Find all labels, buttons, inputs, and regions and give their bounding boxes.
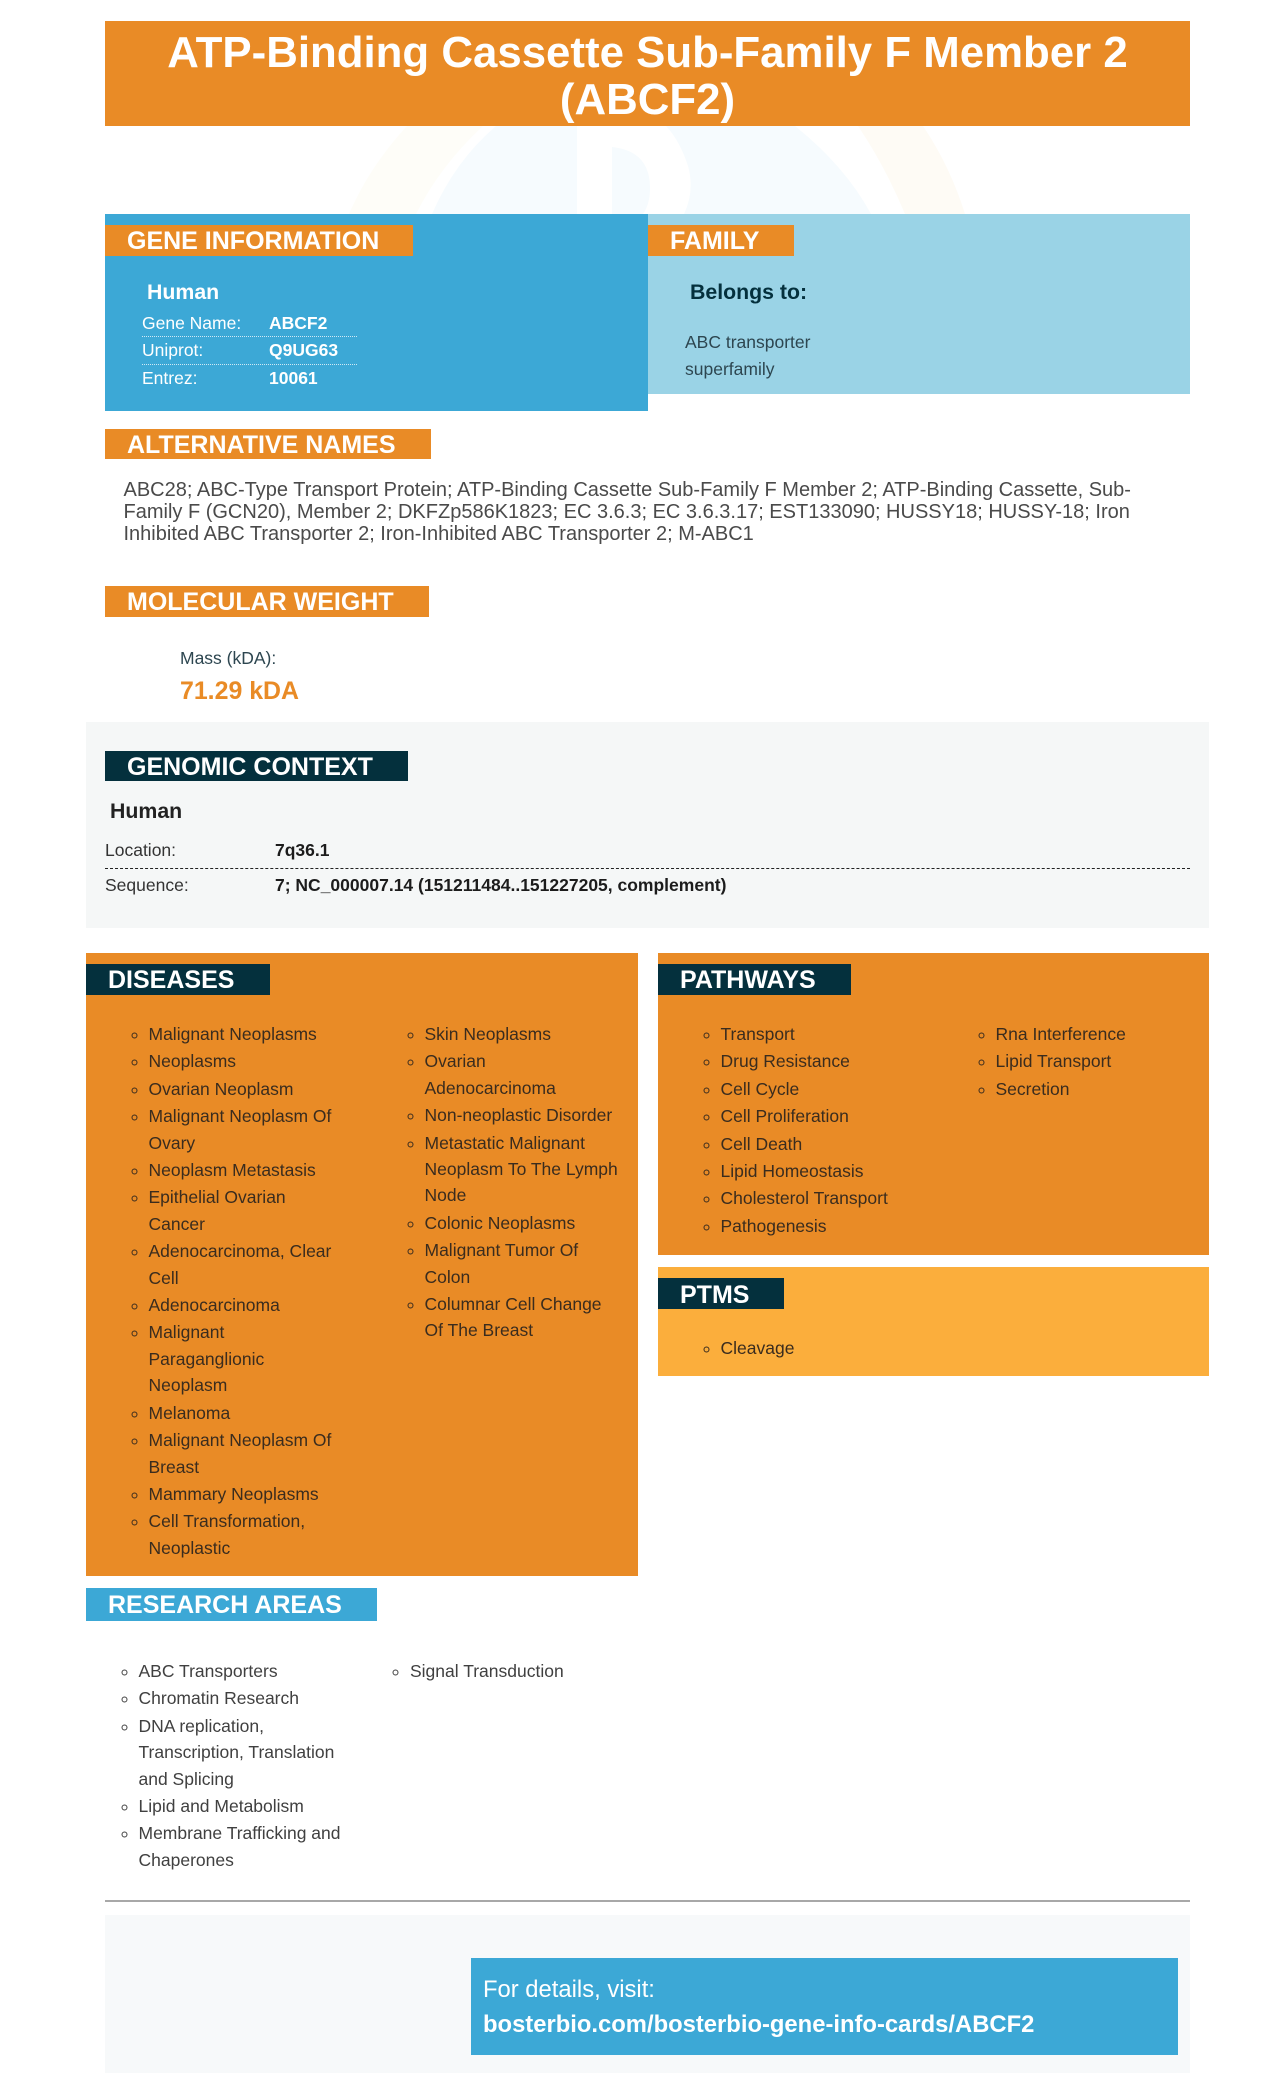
family value bbox=[685, 332, 810, 379]
alternative names text bbox=[124, 479, 1131, 545]
panel: genomic context bbox=[86, 722, 1209, 928]
pathway list column 2: Rna Interference bbox=[996, 1024, 1126, 1044]
pathway list column 1: Cell Cycle bbox=[720, 1079, 799, 1099]
title banner bbox=[105, 21, 1190, 126]
entrez row: Entrez: bbox=[142, 368, 197, 388]
panel: pathways bbox=[658, 953, 1209, 1255]
research list column 1: Chromatin Research bbox=[138, 1688, 299, 1708]
title banner: (ABCF2) bbox=[560, 75, 735, 124]
pathway list column 2 bbox=[978, 1024, 1126, 1099]
background watermark bbox=[432, 126, 965, 214]
species label: Human bbox=[147, 280, 219, 304]
location row bbox=[105, 840, 329, 860]
disease list column 2: Node bbox=[424, 1185, 466, 1205]
heading: ptms: PTMS bbox=[680, 1281, 749, 1309]
panel: ptms bbox=[658, 1267, 1209, 1376]
disease list column 1: Cell bbox=[148, 1268, 179, 1288]
gene name row: Gene Name: bbox=[142, 313, 241, 333]
pathway list column 2: Secretion bbox=[996, 1079, 1069, 1099]
disease list column 1: Adenocarcinoma bbox=[148, 1295, 280, 1315]
disease list column 2: Of The Breast bbox=[424, 1320, 533, 1340]
disease list column 1: Malignant bbox=[148, 1322, 224, 1342]
heading: gene information: GENE INFORMATION bbox=[127, 227, 379, 255]
ptm list: Cleavage bbox=[720, 1338, 794, 1358]
research list column 1 bbox=[122, 1661, 341, 1870]
pathway list column 1: Cholesterol Transport bbox=[720, 1188, 888, 1208]
location row: Location: bbox=[105, 840, 176, 860]
disease list column 2: Columnar Cell Change bbox=[424, 1294, 602, 1314]
alternative names text: Family F (GCN20), Member 2; DKFZp586K1823; EC 3.6.3; EC 3.6.3.17; EST133090; HUSSY18; HUSSY-18; Iron bbox=[124, 501, 1130, 523]
panel: genomic context: 7q36.1 bbox=[275, 840, 329, 860]
research list column 1: Lipid and Metabolism bbox=[138, 1796, 304, 1816]
alternative names text: Inhibited ABC Transporter 2; Iron-Inhibited ABC Transporter 2; M-ABC1 bbox=[124, 523, 754, 545]
research list column 1: Membrane Trafficking and bbox=[138, 1823, 341, 1843]
pathway list column 1: Transport bbox=[720, 1024, 795, 1044]
disease list column 2: Adenocarcinoma bbox=[424, 1078, 556, 1098]
mass label: Mass (kDA): bbox=[180, 648, 276, 668]
panel: genomic context: 7; NC_000007.14 (151211484..151227205, complement) bbox=[275, 875, 726, 895]
disease list column 1: Epithelial Ovarian bbox=[148, 1187, 286, 1207]
divider bbox=[105, 1900, 1190, 1902]
uniprot row bbox=[142, 340, 338, 360]
disease list column 1: Neoplasms bbox=[148, 1051, 236, 1071]
family value: ABC transporter bbox=[685, 332, 810, 352]
entrez row: 10061 bbox=[269, 368, 318, 388]
heading: ptms bbox=[658, 1278, 784, 1309]
disease list column 2 bbox=[408, 1024, 618, 1340]
research list column 2: Signal Transduction bbox=[410, 1661, 564, 1681]
disease list column 2: Neoplasm To The Lymph bbox=[424, 1159, 618, 1179]
belongs to label: Belongs to: bbox=[690, 280, 807, 304]
family value: superfamily bbox=[685, 359, 774, 379]
uniprot row: Uniprot: bbox=[142, 340, 203, 360]
pathway list column 1: Cell Proliferation bbox=[720, 1106, 849, 1126]
pathway list column 1: Cell Death bbox=[720, 1134, 802, 1154]
heading: diseases: DISEASES bbox=[108, 966, 234, 994]
disease list column 1: Malignant Neoplasms bbox=[148, 1024, 317, 1044]
disease list column 1: Neoplasm bbox=[148, 1375, 227, 1395]
heading: pathways bbox=[658, 964, 851, 995]
research list column 1: Chaperones bbox=[138, 1850, 234, 1870]
pathway list column 1 bbox=[704, 1024, 888, 1236]
uniprot row: Q9UG63 bbox=[269, 340, 338, 360]
gene name row: ABCF2 bbox=[269, 313, 327, 333]
panel: family bbox=[648, 214, 1190, 394]
entrez row bbox=[142, 368, 318, 388]
panel: gene information bbox=[105, 214, 648, 411]
disease list column 1: Neoplasm Metastasis bbox=[148, 1160, 316, 1180]
panel: footer bbox=[105, 1915, 1190, 2073]
research list column 1: ABC Transporters bbox=[138, 1661, 278, 1681]
disease list column 1: Mammary Neoplasms bbox=[148, 1484, 319, 1504]
pathway list column 1: Drug Resistance bbox=[720, 1051, 850, 1071]
disease list column 2: Malignant Tumor Of bbox=[424, 1240, 578, 1260]
heading: genomic context: GENOMIC CONTEXT bbox=[127, 753, 373, 781]
disease list column 2: Colon bbox=[424, 1267, 470, 1287]
heading: pathways: PATHWAYS bbox=[680, 966, 816, 994]
disease list column 1: Ovarian Neoplasm bbox=[148, 1079, 293, 1099]
pathway list column 1: Pathogenesis bbox=[720, 1216, 827, 1236]
disease list column 1: Adenocarcinoma, Clear bbox=[148, 1241, 331, 1261]
disease list column 2: Ovarian bbox=[424, 1051, 486, 1071]
disease list column 1: Melanoma bbox=[148, 1403, 230, 1423]
disease list column 1 bbox=[132, 1024, 332, 1558]
alternative names text: ABC28; ABC-Type Transport Protein; ATP-Binding Cassette Sub-Family F Member 2; ATP-Binding Cassette, Sub- bbox=[124, 479, 1131, 501]
heading: diseases bbox=[86, 964, 270, 995]
callout: details link bbox=[471, 1958, 1178, 2055]
heading: family bbox=[648, 225, 794, 256]
research list column 1: Transcription, Translation bbox=[138, 1742, 334, 1762]
pathway list column 1: Lipid Homeostasis bbox=[720, 1161, 863, 1181]
gene name row bbox=[142, 313, 327, 333]
disease list column 2: Metastatic Malignant bbox=[424, 1133, 585, 1153]
disease list column 1: Paraganglionic bbox=[148, 1349, 264, 1369]
title banner: ATP-Binding Cassette Sub-Family F Member 2 bbox=[167, 28, 1128, 77]
mass value: 71.29 kDA bbox=[180, 677, 299, 705]
species label: Human bbox=[110, 799, 182, 823]
disease list column 1: Breast bbox=[148, 1456, 199, 1476]
research list column 1: and Splicing bbox=[138, 1769, 234, 1789]
disease list column 1: Cancer bbox=[148, 1214, 205, 1234]
disease list column 1: Malignant Neoplasm Of bbox=[148, 1106, 331, 1126]
disease list column 2: Skin Neoplasms bbox=[424, 1024, 551, 1044]
sequence row bbox=[105, 875, 726, 895]
research list column 1: DNA replication, bbox=[138, 1716, 264, 1736]
heading: research areas: RESEARCH AREAS bbox=[108, 1591, 342, 1619]
disease list column 1: Cell Transformation, bbox=[148, 1511, 305, 1531]
disease list column 1: Neoplastic bbox=[148, 1538, 230, 1558]
callout: details link: For details, visit: bbox=[483, 1976, 655, 2003]
callout: details link: bosterbio.com/bosterbio-gene-info-cards/ABCF2 bbox=[483, 2011, 1034, 2038]
heading: family: FAMILY bbox=[670, 227, 759, 255]
disease list column 1: Malignant Neoplasm Of bbox=[148, 1430, 331, 1450]
sequence row: Sequence: bbox=[105, 875, 189, 895]
heading: molecular weight: MOLECULAR WEIGHT bbox=[127, 588, 394, 616]
disease list column 2: Non-neoplastic Disorder bbox=[424, 1105, 612, 1125]
heading: research areas bbox=[86, 1588, 377, 1621]
heading: alternative names: ALTERNATIVE NAMES bbox=[127, 431, 396, 459]
panel: diseases bbox=[86, 953, 638, 1576]
disease list column 2: Colonic Neoplasms bbox=[424, 1213, 575, 1233]
pathway list column 2: Lipid Transport bbox=[996, 1051, 1111, 1071]
disease list column 1: Ovary bbox=[148, 1133, 195, 1153]
